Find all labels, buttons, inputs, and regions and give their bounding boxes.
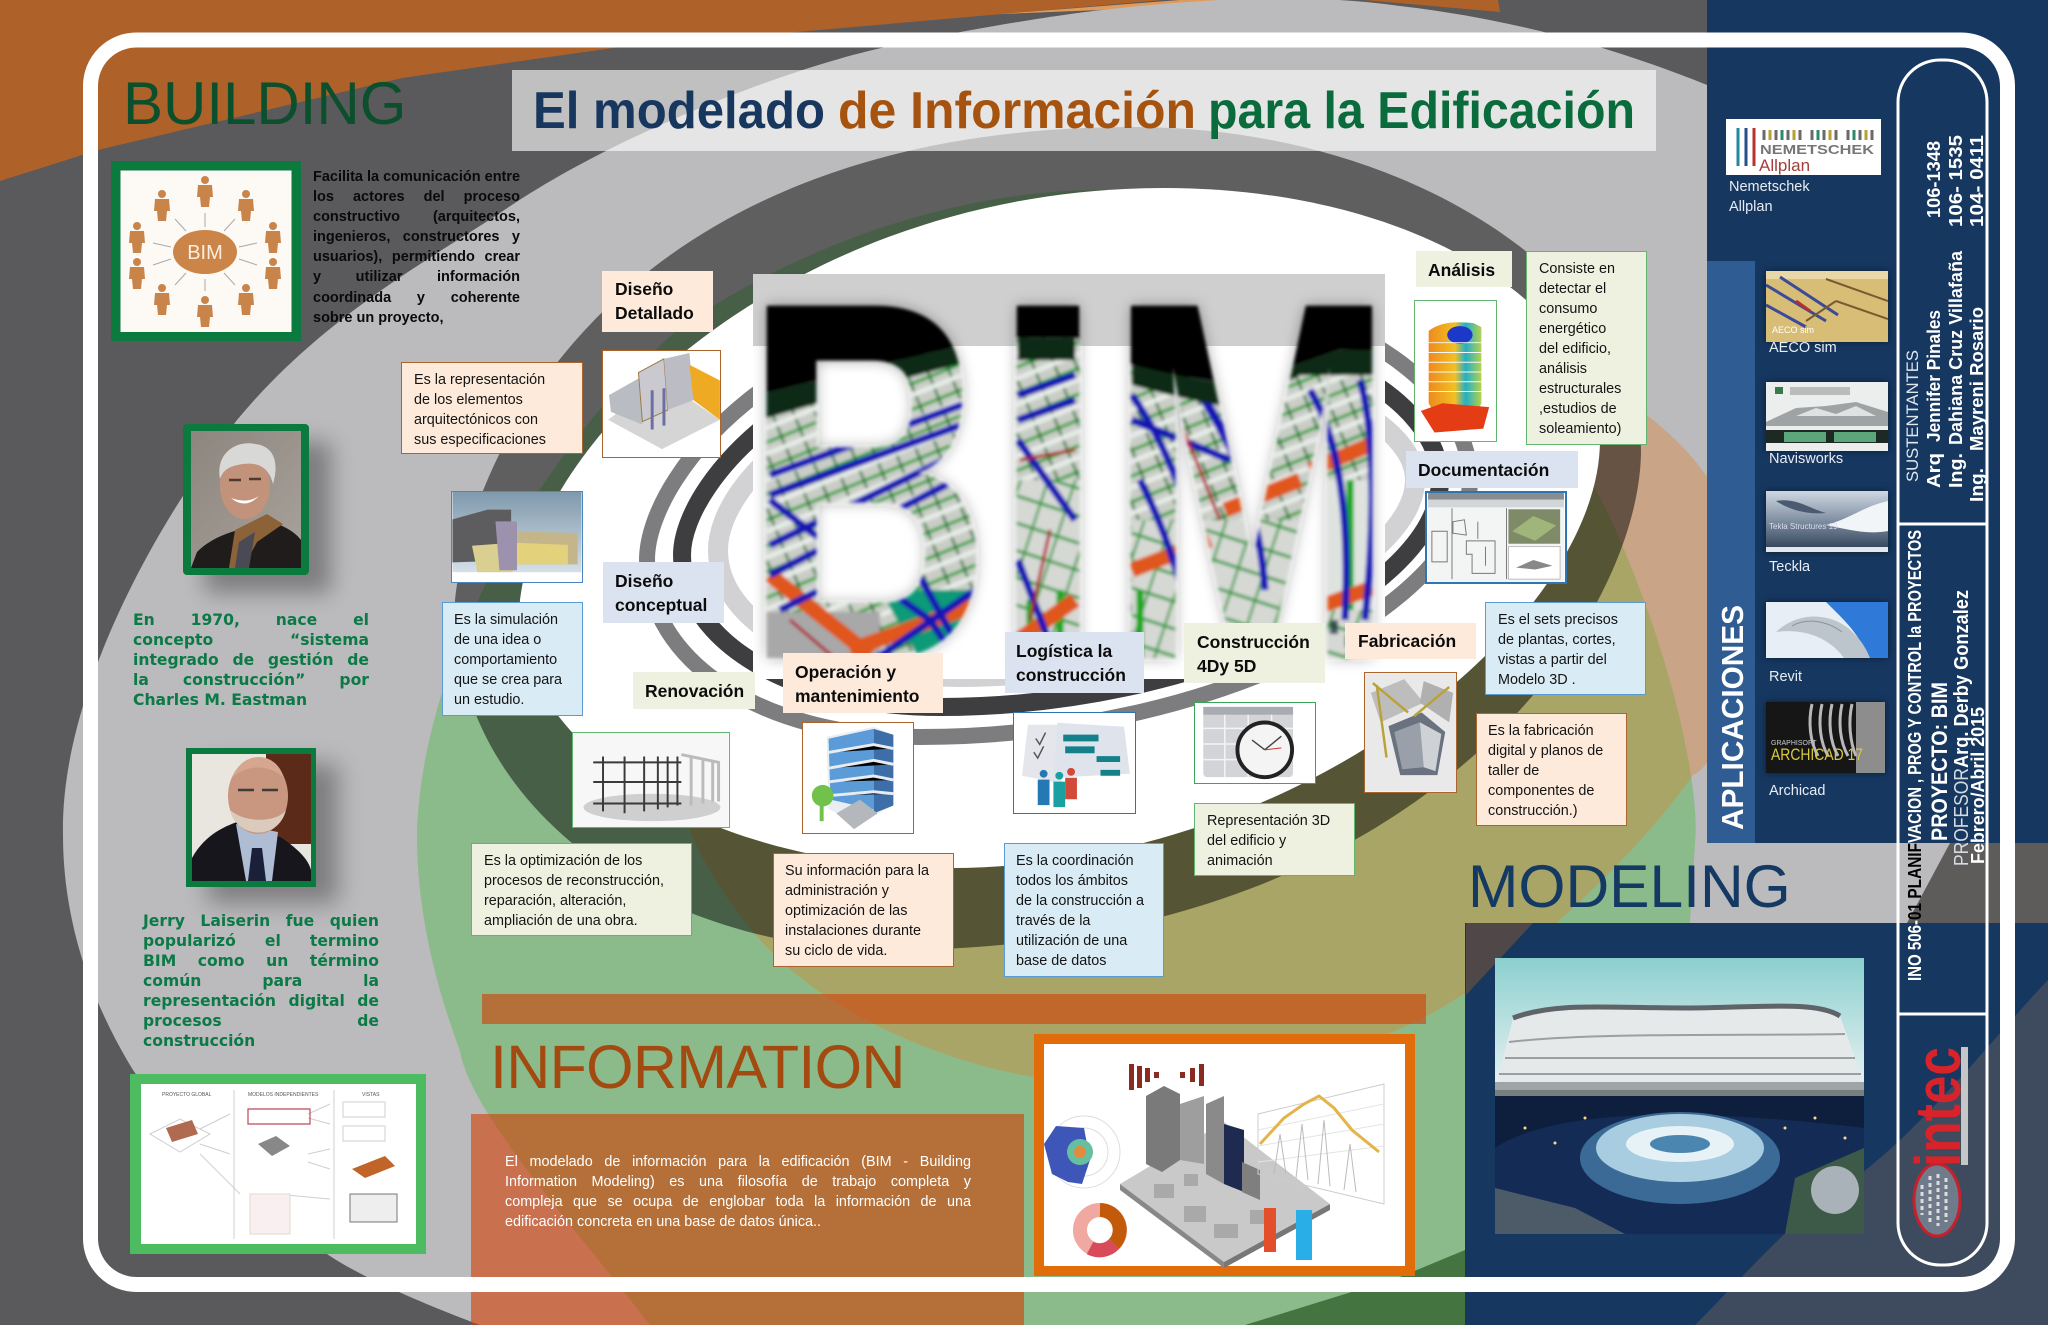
text: 1970 concept: la construcción” por	[133, 671, 369, 689]
description: renovation: reparación, alteración,	[484, 893, 626, 909]
label: Logística la construcción: construcción	[1016, 665, 1126, 685]
students	[1903, 135, 1987, 502]
text: Jerry Laiserin	[142, 912, 379, 1050]
description: conceptual design: un estudio.	[454, 692, 524, 708]
image: structural analysis tower	[1414, 300, 1497, 442]
photo: Charles Eastman	[183, 424, 309, 575]
description: documentation: vistas a partir del	[1498, 652, 1607, 668]
text: Jerry Laiserin: común para la	[143, 972, 379, 990]
text: BIM facilitates communication: ingenieros, constructores y	[313, 229, 520, 245]
text: Jerry Laiserin: representación digital de	[143, 992, 379, 1010]
image: renovation structure	[572, 732, 730, 828]
label: Construcción 4D y 5D: Construcción	[1197, 632, 1310, 652]
logo: intec: intec	[1902, 1047, 1974, 1167]
course and project: VACION , PROG Y CONTROL la PROYECTOS	[1905, 530, 1925, 843]
orange info band	[482, 994, 1426, 1024]
BIM picture	[753, 274, 1385, 679]
description: fabrication: Es la fabricación	[1488, 723, 1594, 739]
image: office building	[802, 722, 914, 834]
course and project: PROYECTO: BIM	[1927, 682, 1952, 841]
image: documentation screen	[1425, 491, 1567, 584]
description: detailed design: de los elementos	[414, 392, 523, 408]
course and project: Arq. Derby Gonzalez	[1951, 590, 1973, 768]
logo: Nemetschek Allplan: Allplan	[1759, 156, 1810, 175]
image: conceptual design model	[451, 491, 583, 583]
label: AECO sim: AECO sim	[1769, 340, 1837, 356]
label: Fabricación: Fabricación	[1358, 631, 1456, 651]
label: Nemetschek Allplan	[1729, 179, 1810, 215]
description: logistics: través de la	[1016, 913, 1090, 929]
label: Renovación: Renovación	[645, 681, 744, 701]
image: Revit	[1766, 602, 1888, 658]
image: stadium	[1495, 958, 1864, 1234]
label: Diseño Detallado: Diseño	[615, 279, 673, 299]
text: BIM definition: El modelado de información para la edificación (BIM - Building	[505, 1154, 971, 1170]
text: BIM facilitates communication: los actores del proceso	[313, 189, 520, 205]
description: analysis: energético	[1539, 321, 1606, 337]
description: documentation	[1485, 602, 1646, 695]
students: Arq	[1924, 453, 1944, 488]
students: SUSTENTANTES	[1903, 350, 1922, 482]
description: fabrication: digital y planos de	[1488, 743, 1603, 759]
label: Documentación	[1406, 451, 1578, 488]
course and project: PROFESOR	[1951, 768, 1973, 866]
description: fabrication: taller de	[1488, 763, 1539, 779]
image: project model diagram: MODELOS INDEPENDIENTES	[248, 1092, 319, 1098]
description: detailed design	[401, 362, 583, 454]
description: conceptual design: que se crea para	[454, 672, 562, 688]
text: 1970 concept	[133, 611, 369, 709]
course and project: INO 506-	[1905, 920, 1925, 981]
description: logistics: Es la coordinación	[1016, 853, 1134, 869]
label: Logística la construcción	[1005, 632, 1144, 693]
text: Jerry Laiserin: BIM como un término	[143, 952, 379, 970]
image: BIM stakeholders diagram	[111, 161, 301, 341]
description: conceptual design	[442, 602, 583, 716]
students: Dahiana Cruz Villafaña	[1946, 250, 1966, 445]
label: Archicad: Archicad	[1769, 783, 1825, 799]
description: documentation: Es el sets precisos	[1498, 612, 1618, 628]
label: Operación y mantenimiento	[783, 653, 943, 713]
students: Ing.	[1967, 468, 1987, 502]
label: Navisworks: Navisworks	[1769, 451, 1843, 467]
text: Jerry Laiserin: construcción	[143, 1032, 255, 1050]
heading: BUILDING: BUILDING	[123, 70, 406, 137]
label: Análisis	[1416, 251, 1512, 287]
image: Teckla	[1766, 491, 1888, 552]
description: logistics: base de datos	[1016, 953, 1106, 969]
panel: APLICACIONES	[1707, 261, 1755, 843]
description: detailed design: arquitectónicos con	[414, 412, 538, 428]
description: documentation: de plantas, cortes,	[1498, 632, 1616, 648]
description: logistics: utilización de una	[1016, 933, 1127, 949]
text: BIM definition	[505, 1154, 971, 1230]
image: project model diagram: VISTAS	[362, 1092, 380, 1098]
label: Diseño Detallado	[602, 271, 713, 332]
text: Jerry Laiserin: Jerry Laiserin fue quien	[143, 912, 379, 930]
image: project model diagram: PROYECTO GLOBAL	[162, 1092, 212, 1098]
panel: APLICACIONES: APLICACIONES	[1715, 605, 1750, 830]
text: BIM facilitates communication: y utilizar información	[313, 269, 520, 285]
label: Nemetschek Allplan: Allplan	[1729, 199, 1773, 215]
label: Construcción 4D y 5D	[1184, 623, 1325, 683]
description: construction	[1194, 803, 1355, 876]
course and project: Febrero/Abril 2015	[1968, 707, 1988, 864]
description: conceptual design: comportamiento	[454, 652, 557, 668]
text: BIM facilitates communication	[313, 169, 520, 326]
students: Ing.	[1946, 453, 1966, 488]
image: BIM stakeholders diagram: BIM	[187, 242, 223, 264]
description: renovation: Es la optimización de los	[484, 853, 642, 869]
image: Archicad: ARCHICAD 17	[1771, 745, 1863, 764]
label: Diseño conceptual: conceptual	[615, 595, 707, 615]
label: Documentación: Documentación	[1418, 460, 1549, 480]
white frame segment over information panel	[471, 1277, 1024, 1292]
text: 1970 concept: concepto “sistema	[133, 631, 369, 649]
panel: title block rail	[1896, 58, 1988, 1266]
description: logistics: de la construcción a	[1016, 893, 1144, 909]
title bar	[512, 70, 1656, 151]
logo: Nemetschek Allplan	[1726, 119, 1881, 175]
image: city data charts	[1034, 1034, 1415, 1276]
description: construction: del edificio y	[1207, 833, 1286, 849]
description: analysis: análisis	[1539, 361, 1587, 377]
text: Jerry Laiserin: popularizó el termino	[143, 932, 379, 950]
description: operation: administración y	[785, 883, 889, 899]
students: 104- 0411	[1967, 135, 1987, 227]
image: construction crane model	[1364, 672, 1457, 793]
text: BIM facilitates communication: constructivo (arquitectos,	[313, 209, 520, 225]
text: BIM facilitates communication: Facilita la comunicación entre	[313, 169, 520, 185]
description: logistics	[1004, 843, 1164, 977]
description: analysis: del edificio,	[1539, 341, 1611, 357]
label: Renovación	[633, 672, 755, 709]
label: Operación y mantenimiento: mantenimiento	[795, 686, 919, 706]
description: renovation: ampliación de una obra.	[484, 913, 638, 929]
description: logistics: todos los ámbitos	[1016, 873, 1128, 889]
description: operation: Su información para la	[785, 863, 929, 879]
text: BIM definition: edificación concreta en una base de datos única..	[505, 1214, 821, 1230]
description: analysis: ,estudios de	[1539, 401, 1617, 417]
title bar: de Información	[838, 82, 1196, 140]
label: Fabricación	[1345, 623, 1476, 659]
photo: Jerry Laiserin	[186, 748, 316, 887]
heading: INFORMATION: INFORMATION	[490, 1033, 905, 1101]
description: fabrication	[1476, 713, 1627, 826]
description: operation: instalaciones durante	[785, 923, 921, 939]
students: Mayreni Rosario	[1967, 307, 1987, 451]
label: Revit: Revit	[1769, 669, 1802, 685]
rail outline	[1898, 60, 1987, 1265]
description: detailed design: Es la representación	[414, 372, 545, 388]
students: 106-1348	[1924, 141, 1944, 218]
label: Logística la construcción: Logística la	[1016, 641, 1112, 661]
image: Archicad	[1766, 702, 1885, 773]
image: Teckla: Tekla Structures 19	[1769, 522, 1838, 531]
logo: intec	[1902, 1047, 1974, 1236]
image: calendar and clock	[1194, 702, 1316, 784]
title bar: El modelado	[533, 82, 825, 140]
description: analysis	[1526, 251, 1647, 445]
description: fabrication: componentes de	[1488, 783, 1594, 799]
text: BIM facilitates communication: sobre un proyecto,	[313, 310, 444, 326]
image: project model diagram	[130, 1074, 426, 1254]
description: operation: su ciclo de vida.	[785, 943, 887, 959]
text: 1970 concept: Charles M. Eastman	[133, 691, 307, 709]
label: Diseño conceptual: Diseño	[615, 571, 673, 591]
image: AECO sim	[1766, 271, 1888, 342]
logo: Nemetschek Allplan: NEMETSCHEK	[1760, 142, 1875, 157]
description: fabrication: construcción.)	[1488, 803, 1578, 819]
label: Operación y mantenimiento: Operación y	[795, 662, 896, 682]
description: renovation	[471, 843, 692, 936]
text: 1970 concept: En 1970, nace el	[133, 611, 369, 629]
label: Diseño conceptual	[603, 562, 724, 623]
course and project: 01 PLANIF	[1905, 843, 1925, 920]
description: analysis: detectar el	[1539, 281, 1606, 297]
image: Archicad: GRAPHISOFT	[1771, 740, 1817, 747]
title bar: para la Edificación	[1208, 82, 1635, 140]
label: Análisis: Análisis	[1428, 260, 1495, 280]
students: Jennifer Pinales	[1924, 310, 1944, 442]
text: BIM facilitates communication: coordinada y coherente	[313, 290, 520, 306]
image: logistics schedule	[1013, 712, 1136, 814]
image: Navisworks	[1766, 382, 1888, 451]
description: documentation: Modelo 3D .	[1498, 672, 1576, 688]
description: conceptual design: de una idea o	[454, 632, 541, 648]
description: construction: Representación 3D	[1207, 813, 1330, 829]
course and project	[1905, 530, 1988, 981]
image: AECO sim: AECO sim	[1772, 325, 1814, 335]
label: Construcción 4D y 5D: 4Dy 5D	[1197, 656, 1256, 676]
description: operation: optimización de las	[785, 903, 907, 919]
description: operation	[773, 853, 954, 967]
label: Nemetschek Allplan: Nemetschek	[1729, 179, 1810, 195]
text: BIM definition: Information Modeling) es una filosofía de trabajo completa y	[505, 1174, 971, 1190]
image: detailed design model	[602, 350, 721, 458]
description: analysis: consumo	[1539, 301, 1597, 317]
text: BIM definition: compleja que se ocupa de englobar toda la información de una	[505, 1194, 971, 1210]
heading: MODELING: MODELING	[1468, 852, 1791, 920]
students: 106- 1535	[1946, 135, 1966, 227]
description: analysis: estructurales	[1539, 381, 1621, 397]
description: renovation: procesos de reconstrucción,	[484, 873, 664, 889]
description: conceptual design: Es la simulación	[454, 612, 558, 628]
label: Diseño Detallado: Detallado	[615, 303, 694, 323]
description: detailed design: sus especificaciones	[414, 432, 546, 448]
text: BIM facilitates communication: usuarios), permitiendo crear	[313, 249, 520, 265]
description: analysis: Consiste en	[1539, 261, 1615, 277]
description: construction: animación	[1207, 853, 1273, 869]
panel: information text	[471, 1114, 1024, 1325]
description: analysis: soleamiento)	[1539, 421, 1621, 437]
text: Jerry Laiserin: procesos de	[143, 1012, 379, 1030]
text: 1970 concept: integrado de gestión de	[133, 651, 369, 669]
label: Teckla: Teckla	[1769, 559, 1810, 575]
